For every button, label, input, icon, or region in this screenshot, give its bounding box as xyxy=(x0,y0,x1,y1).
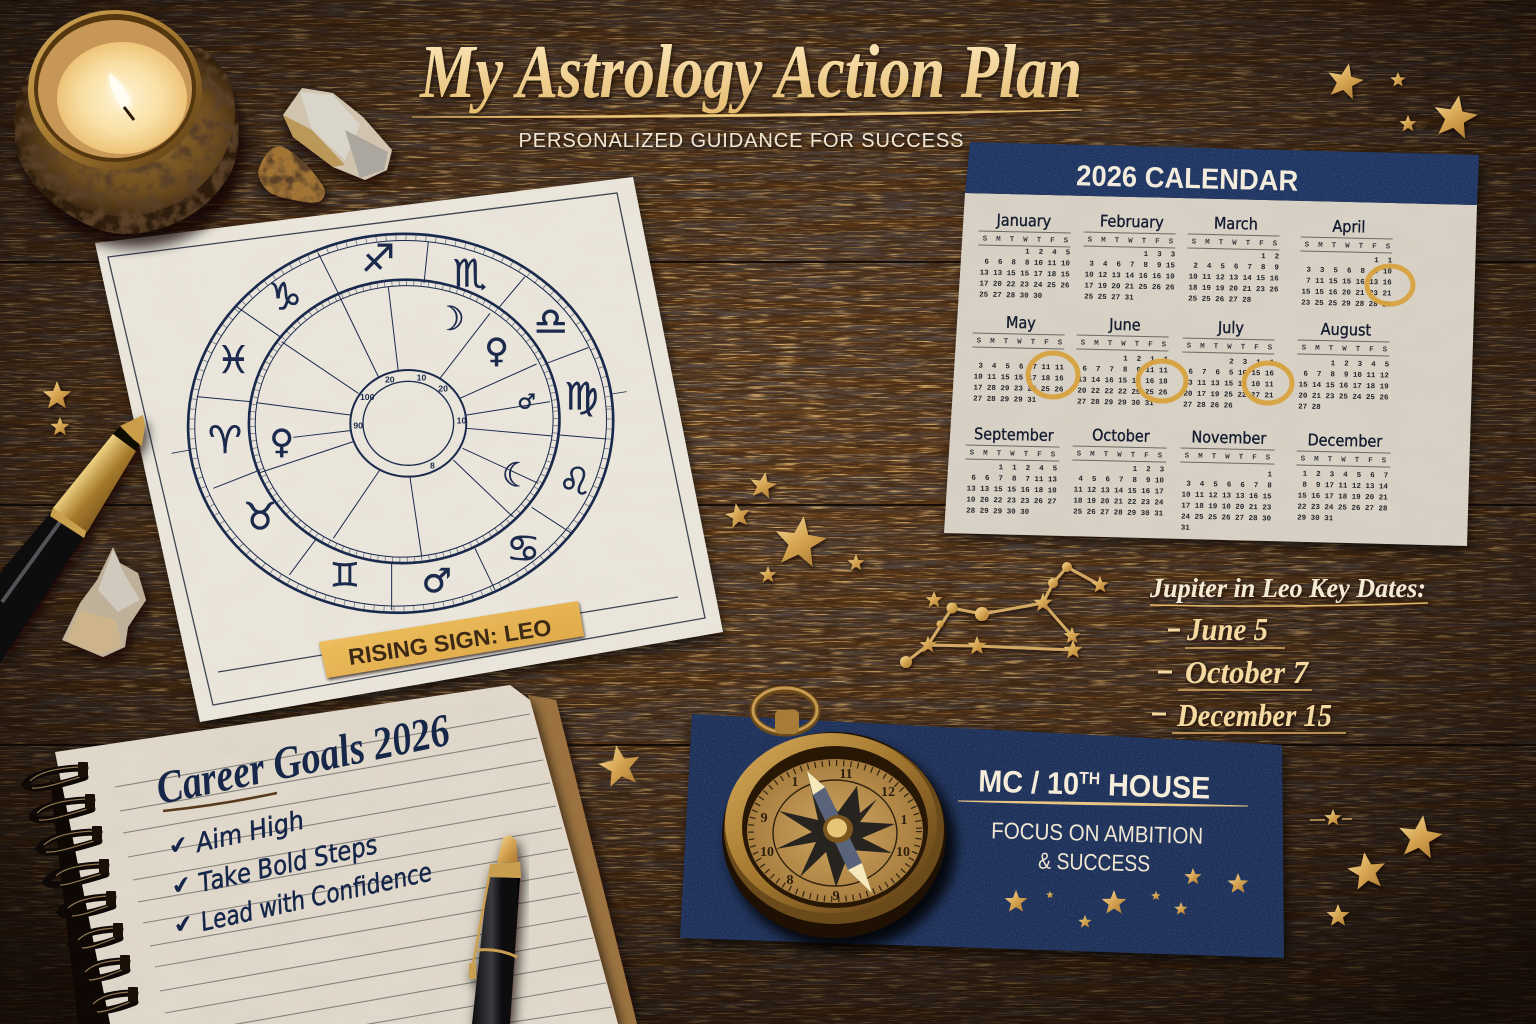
month: August xyxy=(1296,319,1391,414)
month: August: 1 2 3 4 5 xyxy=(1299,359,1390,370)
zodiac glyphs: 90 xyxy=(353,420,363,430)
fountain pen left xyxy=(0,415,145,663)
mc heading: HOUSE xyxy=(1100,767,1211,806)
month: May: S M T W T F S xyxy=(977,338,1063,347)
zodiac glyphs: ♍︎ xyxy=(565,375,599,419)
month: December: 29 30 31 xyxy=(1297,514,1334,523)
zodiac glyphs: 8 xyxy=(430,460,435,470)
month: February: 25 25 27 31 xyxy=(1084,293,1134,303)
month: January: January xyxy=(995,210,1052,231)
month: July: July xyxy=(1217,318,1245,337)
jupiter in leo key dates xyxy=(1149,573,1428,733)
calendar card xyxy=(944,142,1481,552)
tan folder xyxy=(528,695,637,1024)
mc heading: TH xyxy=(1079,769,1101,788)
pen on notebook xyxy=(469,835,521,1024)
zodiac glyphs: ♂︎ xyxy=(517,390,536,414)
zodiac glyphs: ♓︎ xyxy=(216,338,250,382)
chart paper xyxy=(95,177,726,729)
month: August: August xyxy=(1321,319,1372,340)
month: June: 6 7 7 8 9 11 11 xyxy=(1078,365,1168,376)
zodiac glyphs: ♊︎ xyxy=(330,555,360,594)
compass face: 1 xyxy=(900,813,908,828)
month: July: 27 28 26 26 xyxy=(1183,401,1233,411)
month: January: 25 27 28 30 30 xyxy=(979,291,1043,301)
month: October: 4 5 6 7 8 9 10 xyxy=(1074,475,1164,486)
zodiac glyphs: ♀︎ xyxy=(484,331,509,370)
month: December: 15 16 17 18 19 20 21 xyxy=(1298,492,1388,503)
month: December xyxy=(1295,430,1391,525)
month: April: 1 1 xyxy=(1302,255,1393,266)
zodiac glyphs: 10 xyxy=(457,415,466,425)
goals list: Lead with Confidence xyxy=(198,857,435,938)
zodiac glyphs xyxy=(208,236,599,600)
quartz crystal xyxy=(62,547,146,657)
month: February: 1 3 3 xyxy=(1085,249,1176,260)
month: March: 10 11 12 13 14 15 16 xyxy=(1189,273,1279,284)
month: May: May xyxy=(1006,313,1036,332)
month: September: 1 1 2 4 5 xyxy=(967,463,1058,474)
month: March: 18 19 19 20 21 23 26 xyxy=(1188,284,1279,295)
spiral binding xyxy=(25,762,138,1024)
subtitle: PERSONALIZED GUIDANCE FOR SUCCESS xyxy=(518,130,964,152)
month: September: S M T W T F S xyxy=(970,450,1056,459)
month: April: 7 11 15 15 16 13 16 xyxy=(1302,277,1392,288)
month: October xyxy=(1071,425,1167,519)
top right stars xyxy=(1324,60,1481,140)
month: November xyxy=(1179,427,1275,535)
month: October: 18 19 20 21 22 23 24 xyxy=(1073,497,1164,508)
month: November: S M T W T F S xyxy=(1185,453,1271,462)
month: July: 6 7 6 5 10 15 16 xyxy=(1184,368,1274,379)
month: November: 24 25 25 26 27 28 30 xyxy=(1181,513,1272,524)
compass needle xyxy=(807,771,872,893)
month: November: 3 4 5 6 6 7 8 xyxy=(1182,480,1272,491)
month: February: 10 12 13 14 16 16 10 xyxy=(1085,271,1175,282)
month: April: 3 3 5 6 8 9 10 xyxy=(1302,266,1392,277)
date: October 7: October 7 xyxy=(1185,654,1310,690)
month: October: 11 12 13 14 15 16 17 xyxy=(1074,486,1164,497)
zodiac glyphs: 20 xyxy=(385,375,395,385)
month: March: S M T W T F S xyxy=(1192,239,1278,248)
month: September: 10 20 22 23 23 26 27 xyxy=(966,496,1056,507)
zodiac glyphs: 20 xyxy=(438,384,448,394)
month: June: 20 22 22 22 25 25 26 xyxy=(1077,387,1168,398)
month: January: 1 2 4 5 xyxy=(980,247,1071,258)
zodiac glyphs: ♉︎ xyxy=(243,495,277,539)
month: December: 22 23 24 25 26 27 28 xyxy=(1297,503,1388,514)
candle wax xyxy=(57,42,187,154)
mc heading xyxy=(958,763,1248,806)
centre scattered stars xyxy=(724,470,865,582)
zodiac glyphs: ♑︎ xyxy=(268,275,302,319)
holder rim xyxy=(28,10,202,170)
month: November: 1 xyxy=(1182,469,1273,480)
zodiac glyphs: ♂︎ xyxy=(422,561,452,600)
month: April: April xyxy=(1332,217,1366,236)
compass face: 8 xyxy=(786,873,794,888)
jupiter in leo key dates: Jupiter in Leo Key Dates: xyxy=(1149,573,1426,603)
month: May: 27 28 29 29 31 xyxy=(973,395,1037,405)
month: November: 10 11 12 13 13 16 15 xyxy=(1181,491,1272,502)
crystals xyxy=(258,88,392,203)
goals list: Aim High xyxy=(191,806,307,859)
month: January: S M T W T F S xyxy=(983,236,1069,245)
zodiac glyphs: ♋︎ xyxy=(506,526,540,570)
month: February: 17 19 20 21 25 26 26 xyxy=(1084,282,1175,293)
month: January: 6 6 8 8 10 11 10 xyxy=(980,258,1071,269)
month: February: February xyxy=(1100,211,1164,232)
month: August: S M T W T F S xyxy=(1302,345,1388,354)
month: March: March xyxy=(1214,214,1258,234)
leo constellation xyxy=(900,562,1109,668)
title: My Astrology Action Plan xyxy=(419,30,1082,114)
zodiac glyphs: 10 xyxy=(417,373,426,383)
brass compass xyxy=(722,688,956,950)
month: September: 13 13 15 15 16 18 10 xyxy=(967,485,1057,496)
month: February xyxy=(1082,211,1177,304)
zodiac glyphs: 100 xyxy=(360,392,375,402)
focus text: & SUCCESS xyxy=(1038,848,1151,876)
month: June: June xyxy=(1108,315,1141,334)
month: December: 8 9 17 11 12 13 14 xyxy=(1298,481,1388,492)
compass face: 10 xyxy=(896,845,910,860)
mc heading: MC / 10 xyxy=(978,763,1087,802)
calendar header: 2026 CALENDAR xyxy=(1076,160,1299,198)
zodiac glyphs: ♎︎ xyxy=(534,300,568,344)
month: September: September xyxy=(974,424,1054,445)
month: May xyxy=(971,312,1066,406)
zodiac glyphs: ♈︎ xyxy=(208,418,242,462)
month: July: 2 3 1 1 xyxy=(1184,357,1275,368)
month: September xyxy=(964,424,1060,518)
natal chart wheel xyxy=(172,220,627,627)
card stars xyxy=(1005,868,1248,928)
notebook xyxy=(25,685,637,1024)
compass face: 9 xyxy=(832,889,840,904)
month: May: 3 4 5 6 7 11 11 xyxy=(974,362,1064,373)
compass face: 11 xyxy=(839,767,853,782)
gold date circles xyxy=(1028,266,1413,403)
goals list: ✔ xyxy=(169,870,194,901)
month: October: October xyxy=(1092,425,1150,446)
month: May: 17 28 29 23 24 25 26 xyxy=(973,384,1064,395)
compass face: 1 xyxy=(792,775,798,790)
month: March: 25 25 26 27 28 xyxy=(1188,295,1252,305)
month: April xyxy=(1299,216,1394,310)
month: July xyxy=(1181,317,1276,412)
month: March: 1 2 xyxy=(1189,251,1280,262)
month: April: 15 15 16 20 21 23 21 xyxy=(1301,288,1392,299)
month: November: 17 18 19 10 20 21 23 xyxy=(1181,502,1272,513)
month: January xyxy=(977,210,1072,302)
month: June: 13 14 16 15 16 16 18 xyxy=(1078,376,1168,387)
zodiac glyphs: ☽︎ xyxy=(502,454,532,493)
holder body xyxy=(15,30,239,234)
date: December 15: December 15 xyxy=(1176,697,1332,733)
month: February: 3 4 6 7 8 9 15 xyxy=(1085,260,1176,271)
career goals heading: Career Goals 2026 xyxy=(152,704,454,814)
focus text: FOCUS ON AMBITION xyxy=(991,817,1204,849)
month: August: 6 7 8 9 10 11 12 xyxy=(1299,370,1389,381)
zodiac glyphs: ♏︎ xyxy=(453,251,487,295)
compass face: 12 xyxy=(881,785,895,800)
month: December: S M T W T F S xyxy=(1301,456,1387,465)
compass face: 9 xyxy=(760,811,768,826)
zodiac glyphs: ♐︎ xyxy=(361,236,395,280)
goals list xyxy=(166,806,435,940)
month: December: December xyxy=(1307,430,1383,451)
month: June: 1 2 1 1 xyxy=(1078,354,1169,365)
goals list: ✔ xyxy=(166,830,191,861)
small stars left xyxy=(43,381,71,435)
month: September: 6 6 7 8 7 11 13 xyxy=(967,474,1057,485)
compass face: 10 xyxy=(760,845,774,860)
month: July: 20 17 19 25 22 27 21 xyxy=(1183,390,1274,401)
month: February: S M T W T F S xyxy=(1088,237,1174,246)
candle flame xyxy=(108,72,134,120)
month: January: 13 13 15 15 17 18 15 xyxy=(980,269,1070,280)
month: August: 20 21 23 25 24 25 26 xyxy=(1298,392,1389,403)
compass face xyxy=(747,759,923,904)
month: May: 10 11 15 15 17 18 16 xyxy=(974,373,1064,384)
goals list: ✔ xyxy=(171,909,196,940)
month: June: 27 28 29 29 30 31 xyxy=(1077,398,1154,408)
month: January: 17 20 22 23 24 25 26 xyxy=(979,280,1070,291)
month: August: 27 28 xyxy=(1298,403,1321,412)
zodiac glyphs: ♀︎ xyxy=(269,422,294,461)
month: December: 1 2 3 4 5 6 7 xyxy=(1298,470,1388,481)
month: October: S M T W T F S xyxy=(1077,451,1163,460)
zodiac glyphs: ♌︎ xyxy=(558,460,592,504)
month: July: 13 11 13 15 16 10 11 xyxy=(1184,379,1274,390)
date: June 5: June 5 xyxy=(1186,611,1268,647)
month: April: S M T W T F S xyxy=(1305,242,1391,251)
focus text xyxy=(991,817,1204,876)
month: April: 23 25 25 29 28 28 29 xyxy=(1301,299,1392,310)
month: November: 31 xyxy=(1181,524,1190,533)
month: March: 2 4 5 6 7 8 9 xyxy=(1189,262,1280,273)
month: March xyxy=(1186,213,1281,306)
month: October: 25 26 27 28 29 30 31 xyxy=(1073,508,1164,519)
goals list: Take Bold Steps xyxy=(196,830,380,899)
month: October: 1 2 3 xyxy=(1074,464,1165,475)
compass ring xyxy=(753,688,817,734)
bottom right stars xyxy=(1310,809,1445,926)
month: July: S M T W T F S xyxy=(1187,343,1273,352)
month: November: November xyxy=(1191,427,1267,448)
month: June: S M T W T F S xyxy=(1081,340,1167,349)
rising sign label xyxy=(319,601,584,678)
candle in brass holder xyxy=(14,10,247,248)
month: June xyxy=(1075,314,1170,409)
star beside notebook xyxy=(596,742,644,788)
calendar header xyxy=(965,142,1479,205)
month: September: 28 29 29 30 30 xyxy=(966,507,1030,517)
zodiac glyphs: ☽︎ xyxy=(435,299,465,338)
rising sign label: RISING SIGN: LEO xyxy=(347,614,553,670)
blue mc card xyxy=(680,714,1286,964)
month: August: 15 14 15 16 17 18 19 xyxy=(1299,381,1389,392)
